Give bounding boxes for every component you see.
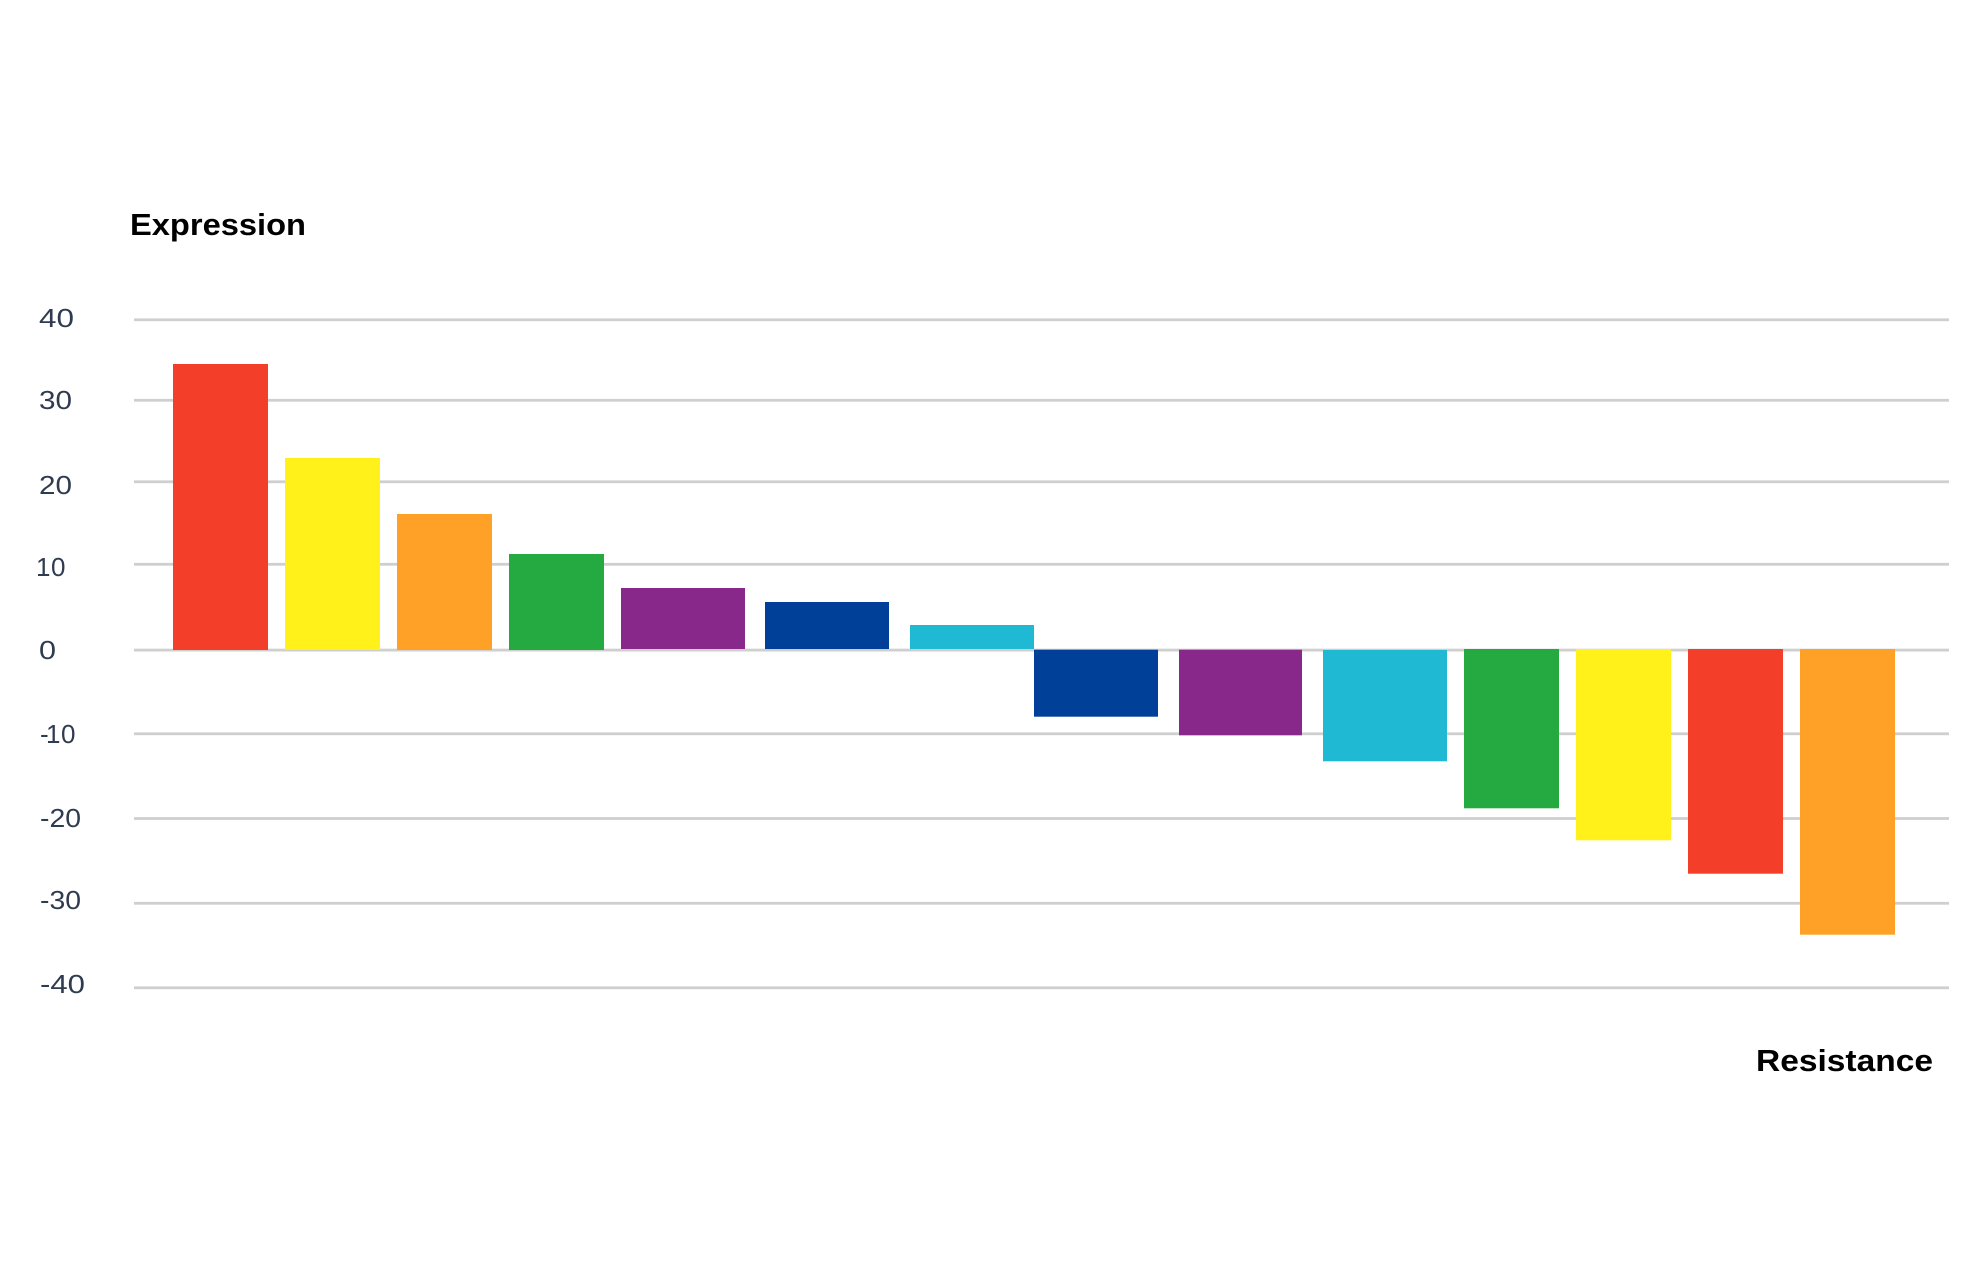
negative bars [1034,649,1895,935]
y axis tick labels: 10 [36,552,65,582]
y axis tick labels: -20 [40,803,81,833]
x axis title: Resistance: Resistance [1756,1043,1933,1078]
y axis tick labels: 30 [39,385,72,415]
y axis title: Expression: Expression [130,207,306,242]
y axis tick labels: 40 [39,303,74,333]
y axis tick labels: 0 [39,635,56,665]
y axis tick labels: -40 [40,969,85,999]
positive bars [173,364,1034,650]
y axis tick labels: 20 [39,470,72,500]
y axis tick labels [36,303,85,999]
y axis tick labels: -10 [40,719,75,749]
y axis tick labels: -30 [40,885,81,915]
